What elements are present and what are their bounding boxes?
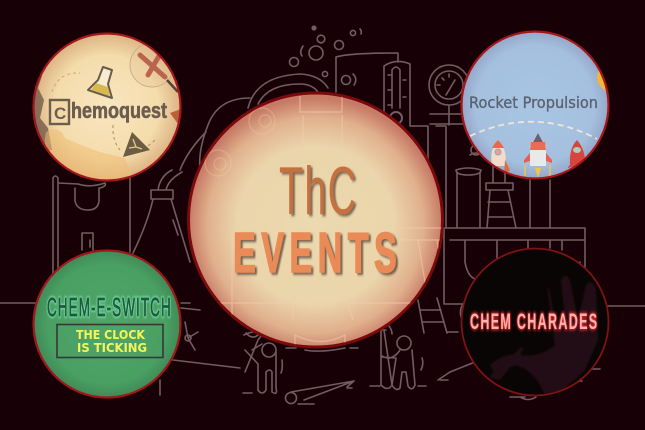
ladder [418,228,458,333]
label: Rocket Propulsion [469,93,598,112]
round flask top arcs [180,74,328,170]
icon: X mark [140,55,165,77]
event circle: Chem-E-Switch [33,250,181,398]
logo: C box [50,100,69,124]
rocket: centre [524,133,552,178]
icon: flask [88,67,112,98]
left conical flask [130,170,190,262]
jar and thermometer [336,53,446,240]
title: ThC: ThC [279,153,356,229]
left retort stand [53,176,105,303]
hands [488,276,598,395]
main circle: ThC Events [180,93,447,350]
ground line [0,303,645,306]
rocket: right [568,140,585,168]
timer box [57,324,163,358]
event circle: Chem Charades [461,248,609,396]
map terrain [34,76,52,150]
dashed arc [470,122,597,139]
timer box: THE CLOCK [76,328,146,342]
coiled tube, right [438,298,600,400]
pressure gauge [429,65,469,125]
label: CHEM CHARADES [470,309,597,334]
logo: C box: C [54,104,66,123]
sun [597,70,606,91]
title: ThC: ThC [281,155,358,231]
label glow and text: CHEM-E-SWITCH [47,293,171,322]
icon: map marker triangle [170,110,180,123]
flame base under flask [286,348,358,351]
icon: radiation triangle [123,132,150,157]
title: EVENTS: EVENTS [235,222,399,286]
timer box: IS TICKING [77,341,147,355]
title: EVENTS: EVENTS [233,220,397,284]
faded flask inside main circle [204,96,442,344]
event circle: Rocket Propulsion [461,31,627,179]
figure with tube, right [370,326,426,389]
back-right shelf [445,145,585,306]
event circle: Chemoquest [30,33,181,185]
figure with tube, left [243,331,282,393]
label glow and text: CHEM-E-SWITCH [47,293,171,322]
rocket: left [491,140,510,176]
small molecule [160,308,240,395]
pencil [286,381,354,404]
bubbles [290,26,361,77]
label: CHEM CHARADES [470,309,597,334]
label: hemoquest: hemoquest [71,98,168,123]
